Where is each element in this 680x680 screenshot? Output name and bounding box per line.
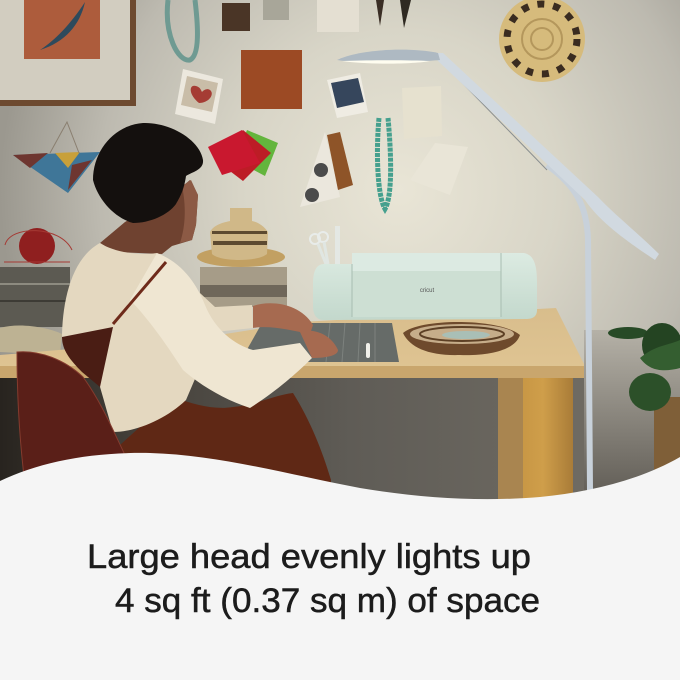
torso and far sleeve [62,243,253,432]
polaroid with heart [175,69,223,124]
skirt and legs [120,393,331,500]
woven basket on wall [499,0,585,82]
paper packet [402,86,442,139]
machine brand label: cricut [420,288,434,294]
cricut machine [313,253,537,320]
cutting mat [240,323,399,362]
person [62,123,338,500]
small wall tile [222,3,250,31]
small hanging items [263,0,411,32]
desk leg [498,378,573,500]
coloured paper swatches [208,130,278,181]
turquoise necklace [377,118,391,209]
lamp wire [442,62,547,170]
lamp head [337,50,440,62]
hair [93,123,203,223]
wall below the desk [0,378,584,500]
potted plant [608,323,680,490]
lamp [337,50,659,490]
white pen on mat [366,343,370,358]
woven basket on stand [197,208,285,267]
desk front edge [0,366,584,378]
scissors and tools [310,226,340,266]
shallow woven bowl [403,322,520,355]
caption line 2: 4 sq ft (0.37 sq m) of space [115,582,540,620]
white wave panel [0,453,680,680]
stained glass ornament [13,122,100,193]
lamp arm [436,53,659,260]
near sleeve arm [130,253,312,408]
sketch card [410,143,468,195]
storage box on desk [200,267,287,307]
framed art [0,0,136,106]
caption [87,538,540,620]
desk top [0,308,584,378]
triangular paper and leather tag [300,132,353,207]
far hand [253,303,313,334]
wall background [0,0,680,500]
necklace on wall [167,0,197,60]
caption line 1: Large head evenly lights up [87,538,531,576]
pinafore strap [113,262,166,324]
polaroid with photo [327,73,368,118]
chair [17,352,124,500]
near hand [300,331,338,358]
neck and face [100,180,198,254]
shelf with craft storage on the left [0,228,72,355]
lit side of the face [180,180,198,243]
orange felt note [241,50,302,109]
lamp stand [547,165,590,490]
wall right of the desk [584,330,680,500]
pinafore bib [62,327,113,387]
